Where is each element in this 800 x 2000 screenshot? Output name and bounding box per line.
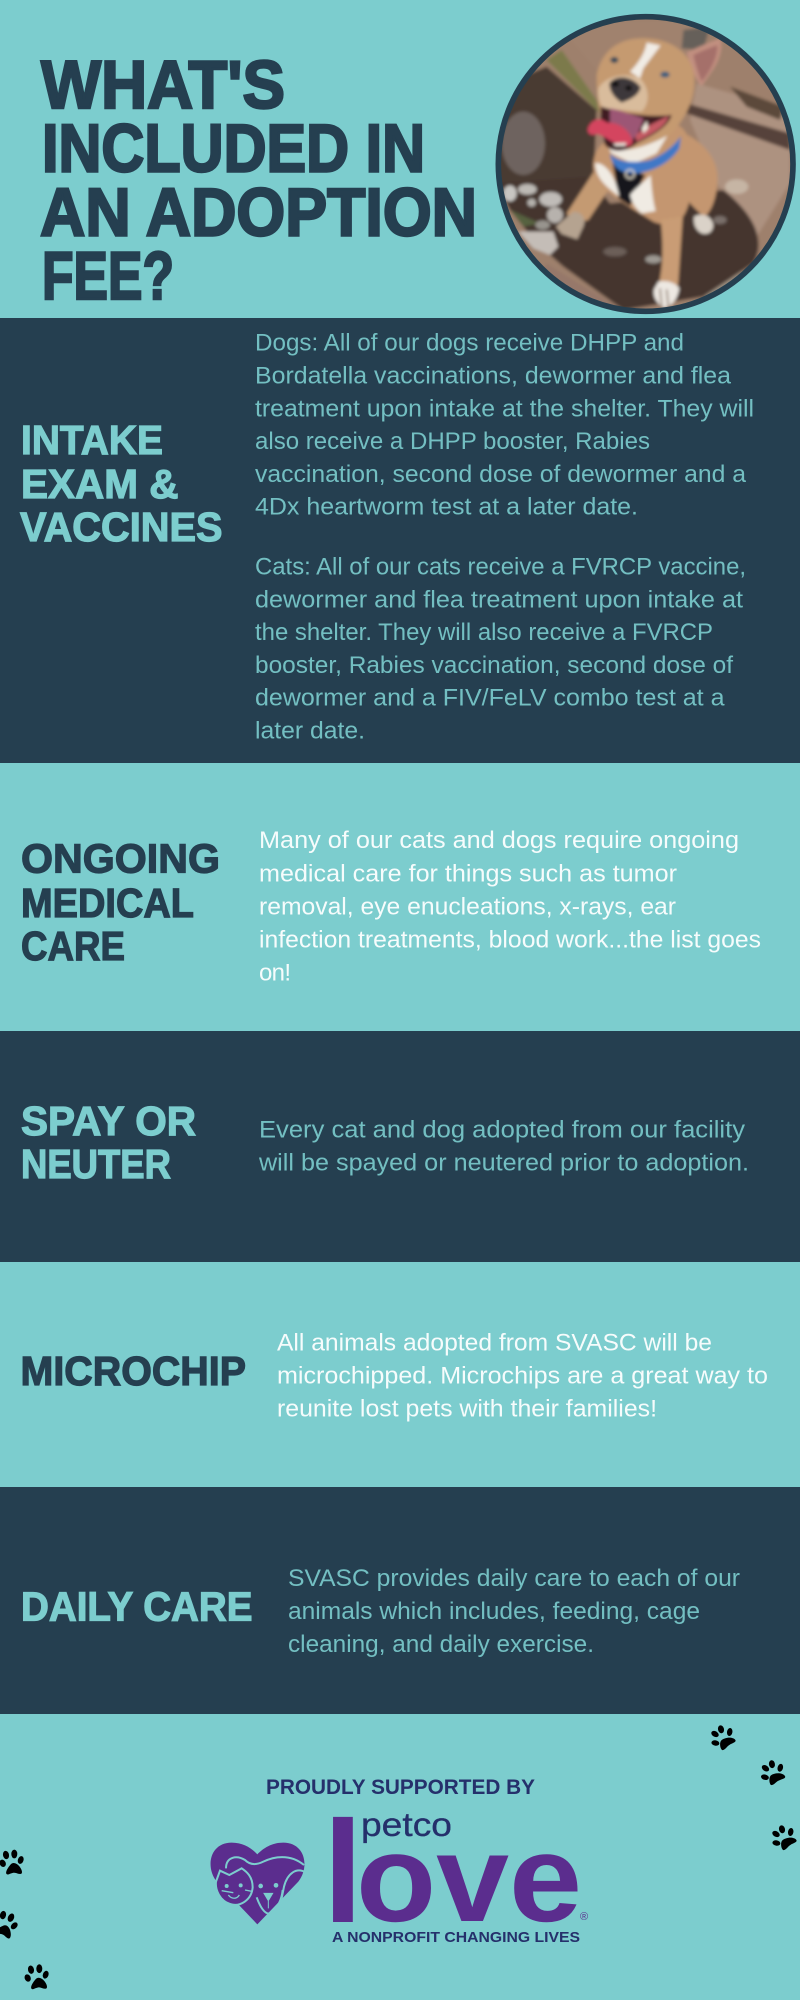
text block: daily care: animals which includes, feeding, cage bbox=[288, 1598, 700, 1625]
dog mouth bbox=[601, 107, 672, 151]
text block: dogs: Dogs: All of our dogs receive DHPP and bbox=[255, 330, 684, 357]
dog harness bbox=[613, 163, 645, 206]
text block: dogs: 4Dx heartworm test at a later date. bbox=[255, 494, 638, 520]
footer panel bbox=[0, 1714, 800, 2000]
text block: cats: booster, Rabies vaccination, second dose of bbox=[255, 652, 733, 679]
title: AN ADOPTION bbox=[40, 175, 477, 251]
dog ear bbox=[687, 38, 721, 86]
wordmark: petco: petco bbox=[361, 1806, 452, 1843]
panel: ongoing medical care bbox=[0, 763, 800, 1031]
text block: daily care bbox=[288, 1565, 740, 1658]
text block: ongoing medical care: removal, eye enucleations, x-rays, ear bbox=[259, 894, 676, 921]
panel: intake exam and vaccines bbox=[0, 318, 800, 763]
title: FEE? bbox=[42, 238, 174, 314]
heading: microchip: MICROCHIP bbox=[20, 1348, 246, 1394]
dog muzzle bbox=[598, 75, 648, 112]
dog left foreleg bbox=[567, 170, 608, 223]
heading: intake exam and vaccines: VACCINES bbox=[20, 504, 222, 550]
heading: spay or neuter: SPAY OR bbox=[21, 1098, 196, 1144]
icon: paw print bbox=[23, 1964, 50, 1989]
text block: daily care: cleaning, and daily exercise. bbox=[288, 1631, 594, 1658]
dog hind leg and back bbox=[687, 135, 719, 217]
sponsor line: PROUDLY SUPPORTED BY bbox=[266, 1776, 535, 1799]
dog blaze bbox=[630, 43, 661, 78]
icon: paw print bbox=[759, 1758, 787, 1786]
text block: cats: the shelter. They will also receive a FVRCP bbox=[255, 619, 713, 646]
header panel bbox=[40, 10, 800, 320]
heading: ongoing medical care: CARE bbox=[21, 923, 125, 969]
text block: microchip: All animals adopted from SVASC will be bbox=[277, 1330, 712, 1357]
icon: paw print bbox=[0, 1850, 25, 1874]
icon: paw print bbox=[0, 1907, 22, 1941]
heading: ongoing medical care: ONGOING bbox=[21, 836, 220, 882]
panel: daily care bbox=[0, 1487, 800, 1714]
heading: daily care: DAILY CARE bbox=[21, 1584, 252, 1630]
icon: heart with cat and dog bbox=[211, 1843, 306, 1924]
dog chest bbox=[603, 134, 668, 164]
text block: ongoing medical care: infection treatments, blood work...the list goes bbox=[259, 927, 761, 954]
text block: dogs: treatment upon intake at the shelter. They will bbox=[255, 395, 754, 422]
dog head bbox=[597, 38, 694, 150]
text block: cats: later date. bbox=[255, 718, 365, 744]
text block: dogs: also receive a DHPP booster, Rabies bbox=[255, 428, 650, 455]
dog collar bbox=[610, 136, 681, 173]
icon: paw print bbox=[771, 1825, 797, 1850]
text block: cats bbox=[255, 554, 746, 744]
text block: cats: Cats: All of our cats receive a FVRCP vaccine, bbox=[255, 554, 746, 580]
dog tongue bbox=[588, 119, 633, 146]
text block: spay or neuter bbox=[258, 1117, 749, 1177]
heading: intake exam and vaccines: INTAKE bbox=[21, 417, 163, 463]
registered mark: ® bbox=[580, 1911, 588, 1923]
text block: dogs: Bordatella vaccinations, dewormer and flea bbox=[255, 362, 732, 390]
heading: spay or neuter bbox=[21, 1098, 196, 1187]
text block: spay or neuter: will be spayed or neutered prior to adoption. bbox=[258, 1150, 749, 1177]
photo: smiling dog in circular frame bbox=[490, 10, 800, 320]
text block: cats: dewormer and a FIV/FeLV combo test at a bbox=[255, 685, 725, 712]
text block: microchip: microchipped. Microchips are a great way to bbox=[277, 1363, 768, 1390]
text block: daily care: SVASC provides daily care to each of our bbox=[288, 1565, 740, 1592]
panel: microchip bbox=[0, 1262, 800, 1487]
text block: microchip bbox=[277, 1330, 768, 1423]
heading: spay or neuter: NEUTER bbox=[21, 1141, 171, 1187]
text block: dogs bbox=[255, 330, 754, 520]
heading: intake exam and vaccines: EXAM & bbox=[21, 461, 178, 507]
text block: microchip: reunite lost pets with their families! bbox=[277, 1396, 657, 1423]
text block: ongoing medical care: medical care for things such as tumor bbox=[259, 861, 677, 888]
wordmark: love: ove bbox=[356, 1810, 582, 1948]
heading: intake exam and vaccines bbox=[20, 417, 222, 550]
dog eyes bbox=[610, 57, 618, 63]
title: INCLUDED IN bbox=[42, 111, 425, 187]
text block: ongoing medical care bbox=[259, 827, 761, 987]
logo: petco love bbox=[211, 1791, 588, 1953]
text block: dogs: vaccination, second dose of dewormer and a bbox=[255, 461, 747, 488]
dog nose bbox=[609, 78, 641, 103]
text block: ongoing medical care: on! bbox=[259, 960, 291, 987]
panel: spay or neuter bbox=[0, 1031, 800, 1262]
text block: ongoing medical care: Many of our cats and dogs require ongoing bbox=[259, 827, 739, 854]
dog right foreleg bbox=[658, 217, 683, 287]
text block: cats: dewormer and flea treatment upon intake at bbox=[255, 586, 743, 613]
title bbox=[40, 47, 477, 314]
tagline: A NONPROFIT CHANGING LIVES bbox=[332, 1929, 580, 1946]
heading: ongoing medical care bbox=[21, 836, 220, 969]
icon: paw print bbox=[710, 1725, 736, 1750]
title: WHAT'S bbox=[41, 47, 285, 123]
text block: spay or neuter: Every cat and dog adopted from our facility bbox=[259, 1117, 745, 1144]
heading: ongoing medical care: MEDICAL bbox=[21, 880, 194, 926]
wordmark: love: l bbox=[323, 1791, 363, 1953]
dog torso bbox=[593, 125, 694, 224]
